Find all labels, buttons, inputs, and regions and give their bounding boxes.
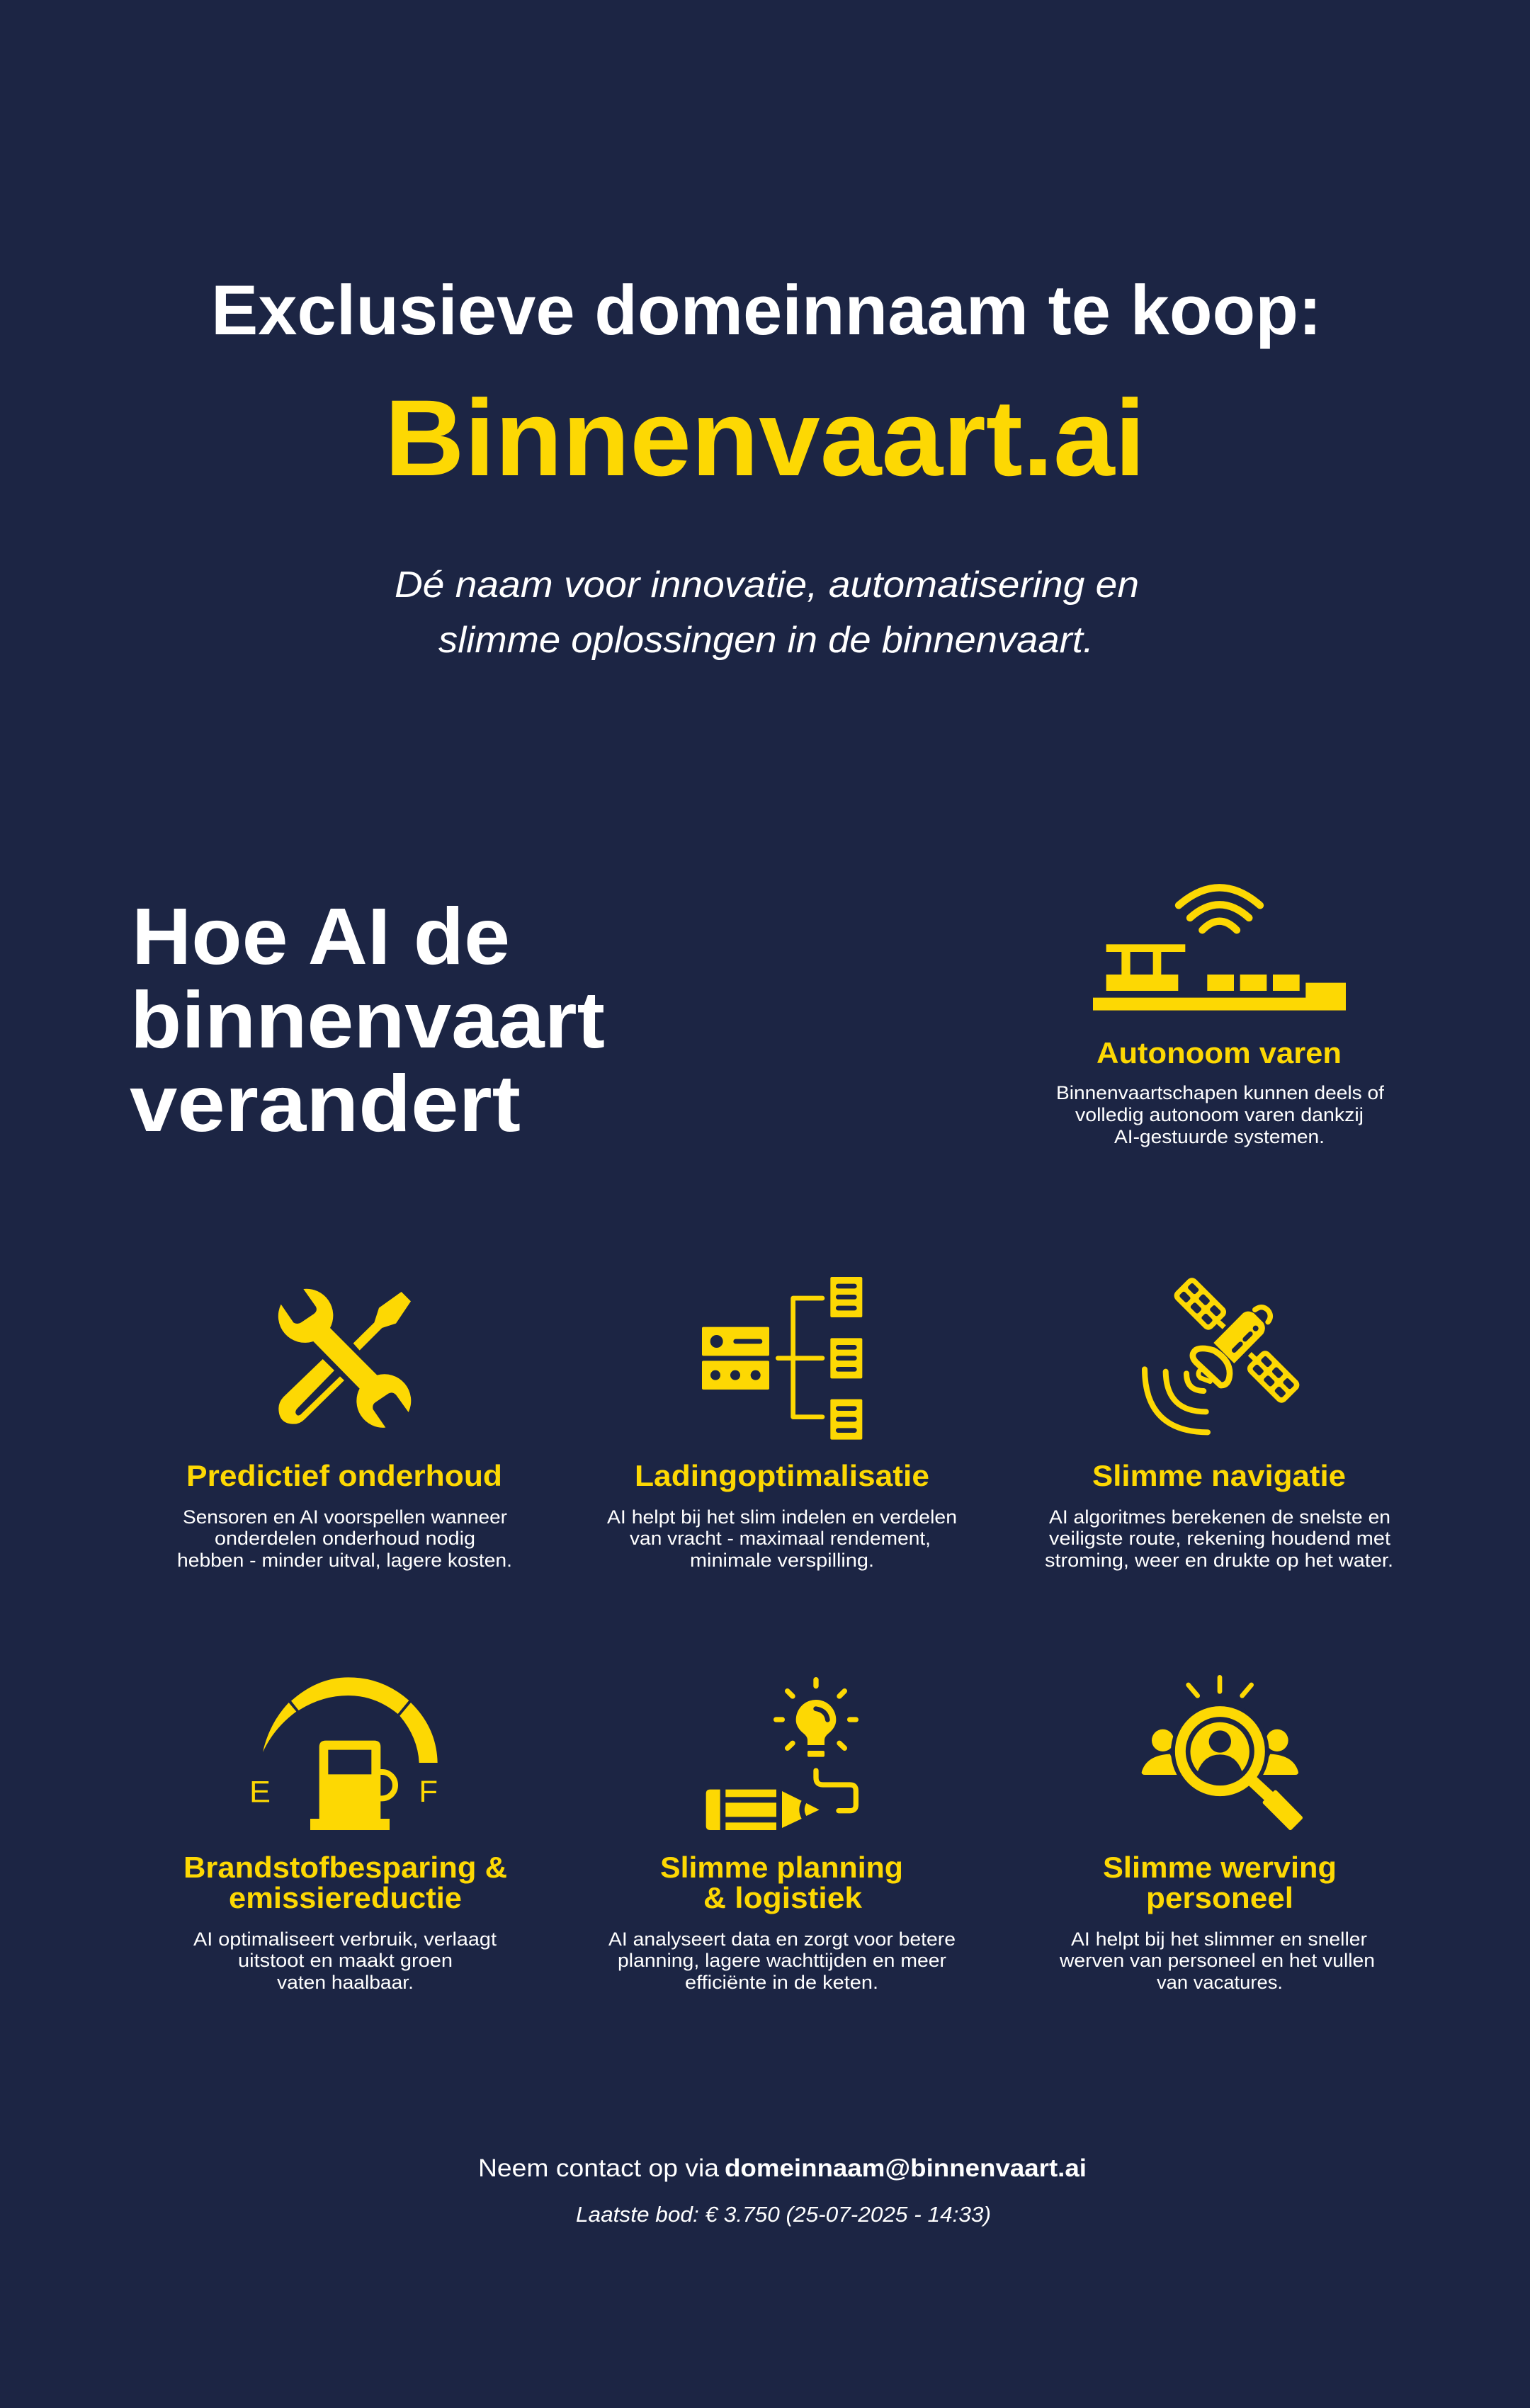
heading: Slimme navigatie: [1092, 1459, 1346, 1492]
icon: wrench and screwdriver: [278, 1289, 411, 1428]
heading: Ladingoptimalisatie: [635, 1459, 929, 1492]
description: AI helpt bij het slimmer en sneller: [1071, 1929, 1367, 1950]
contact line: Neem contact op via: [478, 2154, 720, 2182]
description: [1056, 1082, 1385, 1147]
description: Binnenvaartschapen kunnen deels of: [1056, 1082, 1385, 1103]
description: Sensoren en AI voorspellen wanneer: [183, 1506, 507, 1528]
heading: & logistiek: [703, 1881, 863, 1914]
description: [177, 1506, 512, 1571]
icon: server with documents: [702, 1277, 862, 1440]
icon: fuel gauge and pump: E: [249, 1776, 271, 1810]
description: [607, 1506, 957, 1571]
domain name: Binnenvaart.ai: [385, 377, 1145, 499]
icon: magnifier with people: [1142, 1677, 1300, 1828]
footer: [478, 2154, 1087, 2227]
description: [608, 1929, 956, 1993]
tagline: [395, 564, 1139, 661]
heading: Slimme planning: [660, 1851, 903, 1884]
description: volledig autonoom varen dankzij: [1075, 1104, 1364, 1125]
description: onderdelen onderhoud nodig: [215, 1528, 475, 1549]
description: AI analyseert data en zorgt voor betere: [608, 1929, 956, 1950]
panel: slimme navigatie: [1045, 1276, 1393, 1571]
icon: satellite: [1145, 1276, 1302, 1432]
tagline: Dé naam voor innovatie, automatisering en: [395, 564, 1139, 606]
heading: emissiereductie: [229, 1881, 462, 1914]
description: [193, 1929, 497, 1993]
panel: predictief onderhoud: [177, 1289, 512, 1571]
description: stroming, weer en drukte op het water.: [1045, 1550, 1393, 1571]
description: minimale verspilling.: [690, 1550, 874, 1571]
heading: Predictief onderhoud: [186, 1459, 502, 1492]
description: uitstoot en maakt groen: [238, 1950, 453, 1971]
panel: ladingoptimalisatie: [607, 1277, 957, 1571]
section heading: binnenvaart: [130, 975, 605, 1064]
description: AI-gestuurde systemen.: [1114, 1126, 1325, 1147]
description: [1059, 1929, 1375, 1993]
header: [211, 271, 1322, 661]
heading: Autonoom varen: [1096, 1036, 1342, 1069]
description: van vacatures.: [1157, 1972, 1283, 1993]
description: veiligste route, rekening houdend met: [1049, 1528, 1391, 1549]
tagline: slimme oplossingen in de binnenvaart.: [438, 620, 1094, 661]
icon: ship with wifi: [1093, 887, 1346, 1011]
panel: autonoom varen: [1056, 887, 1385, 1147]
description: AI optimaliseert verbruik, verlaagt: [193, 1929, 497, 1950]
description: planning, lagere wachttijden en meer: [618, 1950, 946, 1971]
heading: Slimme werving: [1103, 1851, 1337, 1884]
heading: personeel: [1146, 1881, 1293, 1914]
panel: slimme werving: [1059, 1677, 1375, 1993]
icon: fuel gauge and pump: F: [419, 1775, 438, 1809]
description: vaten haalbaar.: [277, 1972, 414, 1993]
description: efficiënte in de keten.: [685, 1972, 878, 1993]
icon: fuel gauge and pump: [249, 1677, 438, 1830]
panel: brandstofbesparing: [183, 1677, 507, 1993]
heading: [660, 1851, 903, 1914]
description: van vracht - maximaal rendement,: [630, 1528, 931, 1549]
description: AI algoritmes berekenen de snelste en: [1049, 1506, 1390, 1528]
description: [1045, 1506, 1393, 1571]
description: hebben - minder uitval, lagere kosten.: [177, 1550, 512, 1571]
section heading: verandert: [130, 1059, 521, 1148]
description: AI helpt bij het slim indelen en verdelen: [607, 1506, 957, 1528]
description: werven van personeel en het vullen: [1059, 1950, 1375, 1971]
latest bid: Laatste bod: € 3.750 (25-07-2025 - 14:33): [576, 2202, 991, 2227]
panel: slimme planning: [608, 1680, 956, 1993]
heading: [183, 1851, 507, 1914]
title: Exclusieve domeinnaam te koop:: [211, 271, 1322, 349]
section heading: Hoe AI de: [132, 892, 510, 981]
section heading: [130, 892, 605, 1148]
icon: pencil and light bulb: [706, 1680, 856, 1830]
heading: Brandstofbesparing &: [183, 1851, 507, 1884]
contact line: [478, 2154, 1087, 2182]
heading: [1103, 1851, 1337, 1914]
contact line: domeinnaam@binnenvaart.ai: [725, 2154, 1087, 2182]
